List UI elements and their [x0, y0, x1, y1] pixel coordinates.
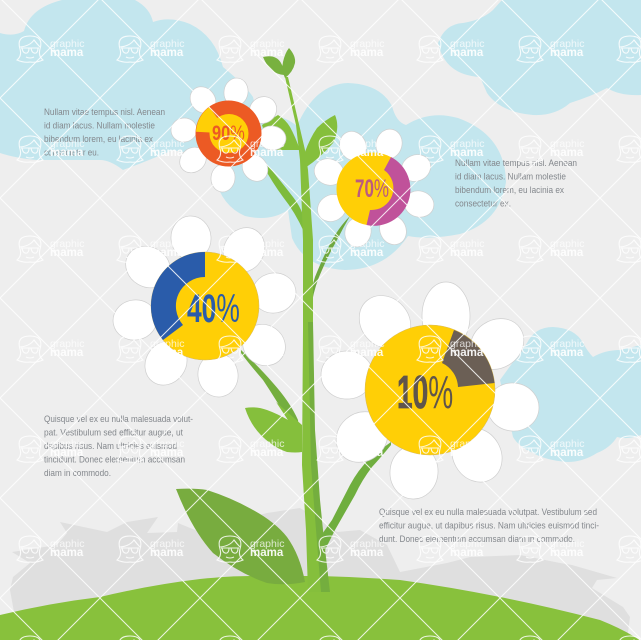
text block: 90% note: id diam lacus. Nullam molestie — [44, 120, 155, 130]
plant: stems and leaves — [176, 48, 391, 592]
chart: donut — [151, 252, 259, 360]
flower: 10% — [321, 282, 542, 501]
text block: 70% note: bibendum lorem, eu lacinia ex — [455, 185, 564, 195]
watermark: logos: mama — [550, 47, 584, 59]
watermark: logos: graphic — [450, 338, 484, 350]
watermark: logos: mama — [450, 447, 484, 459]
watermark: logos: graphic — [350, 338, 384, 350]
text block: 70% note: Nullam vitae tempus nisl. Aenean — [455, 158, 577, 168]
watermark: logos: mama — [550, 147, 584, 159]
watermark: logos: graphic — [550, 238, 584, 250]
cloud: center — [215, 83, 506, 270]
branch: to 70% flower — [308, 216, 350, 312]
watermark: logos: graphic — [150, 538, 184, 550]
ground: green hill — [0, 576, 641, 640]
watermark: logos: graphic — [150, 338, 184, 350]
chart: donut — [196, 100, 262, 166]
watermark: logos: graphic — [150, 438, 184, 450]
text block: 10% note: Quisque vel ex eu nulla malesuada volutpat. Vestibulum sed — [379, 507, 597, 517]
watermark: logos: graphic — [250, 238, 284, 250]
leaf: sprout right — [282, 48, 295, 78]
petals — [169, 76, 288, 194]
watermark: logos: mama — [50, 547, 84, 559]
watermark: logos: mama — [550, 347, 584, 359]
text block: 40% note: tincidunt. Donec elementum accumsan — [44, 454, 185, 464]
watermark: logos: mama — [150, 347, 184, 359]
text block: 70% note: consectetur ex. — [455, 198, 511, 208]
watermark: logos: graphic — [250, 138, 284, 150]
watermark: logos: graphic — [250, 538, 284, 550]
watermark: logos: graphic — [450, 238, 484, 250]
watermark: logos: graphic — [50, 138, 84, 150]
leaf: large lower leaf — [176, 489, 305, 584]
watermark: logos: mama — [150, 447, 184, 459]
flower: 40% — [110, 214, 299, 400]
cloud: bottom right — [500, 327, 641, 462]
watermark: logos: graphic — [150, 238, 184, 250]
watermark: logos: mama — [50, 247, 84, 259]
watermark: logos: mama — [550, 247, 584, 259]
watermark: logos: mama — [450, 247, 484, 259]
watermark: logos: graphic — [350, 538, 384, 550]
watermark: logos: mama — [250, 147, 284, 159]
watermark: logos: graphic — [50, 438, 84, 450]
leaf: lower small — [245, 402, 302, 452]
watermark: logos: graphic — [550, 438, 584, 450]
watermark: logos: graphic — [250, 38, 284, 50]
text block: 10% note: efficitur augue, ut dapibus risus. Nam ultricies euismod tinci- — [379, 520, 599, 530]
flower: 70% — [310, 126, 437, 250]
watermark: logos: graphic — [150, 38, 184, 50]
watermark: logos: graphic — [50, 338, 84, 350]
text block: 40% note — [44, 414, 193, 478]
watermark: logos: mama — [250, 447, 284, 459]
watermark: logos: graphic — [450, 438, 484, 450]
petals — [321, 282, 542, 501]
watermark: logos: graphic — [150, 138, 184, 150]
value: 40%: 40% — [187, 287, 240, 331]
text block: 10% note: dunt. Donec elementum accumsan diam in commodo. — [379, 534, 575, 544]
watermark: logos: mama — [150, 547, 184, 559]
watermark: logos: mama — [50, 47, 84, 59]
watermark: logos: mama — [450, 47, 484, 59]
watermark: logos: mama — [50, 147, 84, 159]
watermark: logos: graphic — [550, 338, 584, 350]
watermark: logos: graphic — [250, 338, 284, 350]
leaf: upper left — [262, 115, 300, 150]
watermark: logos: graphic — [450, 38, 484, 50]
watermark: logos: graphic — [350, 38, 384, 50]
watermark: logos: mama — [250, 547, 284, 559]
watermark: logos: graphic — [550, 138, 584, 150]
watermark: logos: mama — [50, 347, 84, 359]
watermark: logos: mama — [150, 47, 184, 59]
watermark: logos: graphic — [550, 538, 584, 550]
watermark: logos: graphic — [50, 38, 84, 50]
chart: donut — [336, 152, 410, 226]
watermark: logos: graphic — [350, 138, 384, 150]
branch: to 10% flower — [320, 442, 391, 550]
watermark: logos: mama — [450, 347, 484, 359]
text block: 70% note — [455, 158, 577, 208]
watermark: logos: mama — [450, 147, 484, 159]
watermark: logos: mama — [350, 47, 384, 59]
watermark: logos: mama — [350, 147, 384, 159]
leaf: upper right — [305, 115, 337, 168]
watermark: logos: mama — [550, 547, 584, 559]
text block: 40% note: Quisque vel ex eu nulla malesuada volut- — [44, 414, 193, 424]
watermark: logos: graphic — [550, 38, 584, 50]
watermark: logos: graphic — [450, 138, 484, 150]
text block: 70% note: id diam lacus. Nullam molestie — [455, 172, 566, 182]
branch: to 40% flower — [241, 350, 300, 440]
watermark: logos: mama — [350, 247, 384, 259]
text block: 10% note — [379, 507, 599, 544]
text block: 40% note: dapibus risus. Nam ultricies euismod — [44, 441, 177, 451]
watermark: logos: graphic — [350, 438, 384, 450]
leaf: sprout left — [263, 56, 284, 75]
branch: to 90% flower — [264, 161, 304, 232]
value: 70%: 70% — [355, 175, 389, 203]
petals — [110, 214, 299, 400]
watermark: logos: graphic — [50, 238, 84, 250]
watermark: logos: graphic — [350, 238, 384, 250]
watermark: logos: mama — [150, 247, 184, 259]
text block: 90% note: Nullam vitae tempus nisl. Aenean — [44, 107, 165, 117]
watermark: logos: graphic — [450, 538, 484, 550]
watermark: logos: graphic — [250, 438, 284, 450]
text block: 90% note — [44, 107, 165, 158]
chart: donut — [365, 325, 495, 455]
petals — [310, 126, 437, 250]
watermark: logos: mama — [50, 447, 84, 459]
watermark: logos: mama — [250, 247, 284, 259]
value: 10%: 10% — [397, 368, 453, 419]
watermark: logos: mama — [350, 547, 384, 559]
watermark: logos: graphic — [50, 538, 84, 550]
watermark: logos: mama — [350, 347, 384, 359]
flower: 90% — [169, 76, 288, 194]
watermark: logos: mama — [450, 547, 484, 559]
stem: main — [285, 77, 322, 592]
ground silhouette: bushes — [10, 508, 630, 640]
stem: dark stripe — [308, 322, 330, 592]
text block: 90% note: bibendum lorem, eu lacinia ex — [44, 134, 153, 144]
text block: 40% note: diam in commodo. — [44, 468, 111, 478]
watermark: logos: mama — [350, 447, 384, 459]
text block: 40% note: pat. Vestibulum sed efficitur augue, ut — [44, 428, 183, 438]
cloud: top left — [0, 0, 270, 170]
watermark: logos: mama — [150, 147, 184, 159]
watermark: logos: mama — [250, 347, 284, 359]
text block: 90% note: consectetur eu. — [44, 148, 99, 158]
watermark: logos: mama — [550, 447, 584, 459]
watermark: logos: mama — [250, 47, 284, 59]
value: 90%: 90% — [212, 121, 245, 144]
cloud: top right — [438, 0, 641, 115]
